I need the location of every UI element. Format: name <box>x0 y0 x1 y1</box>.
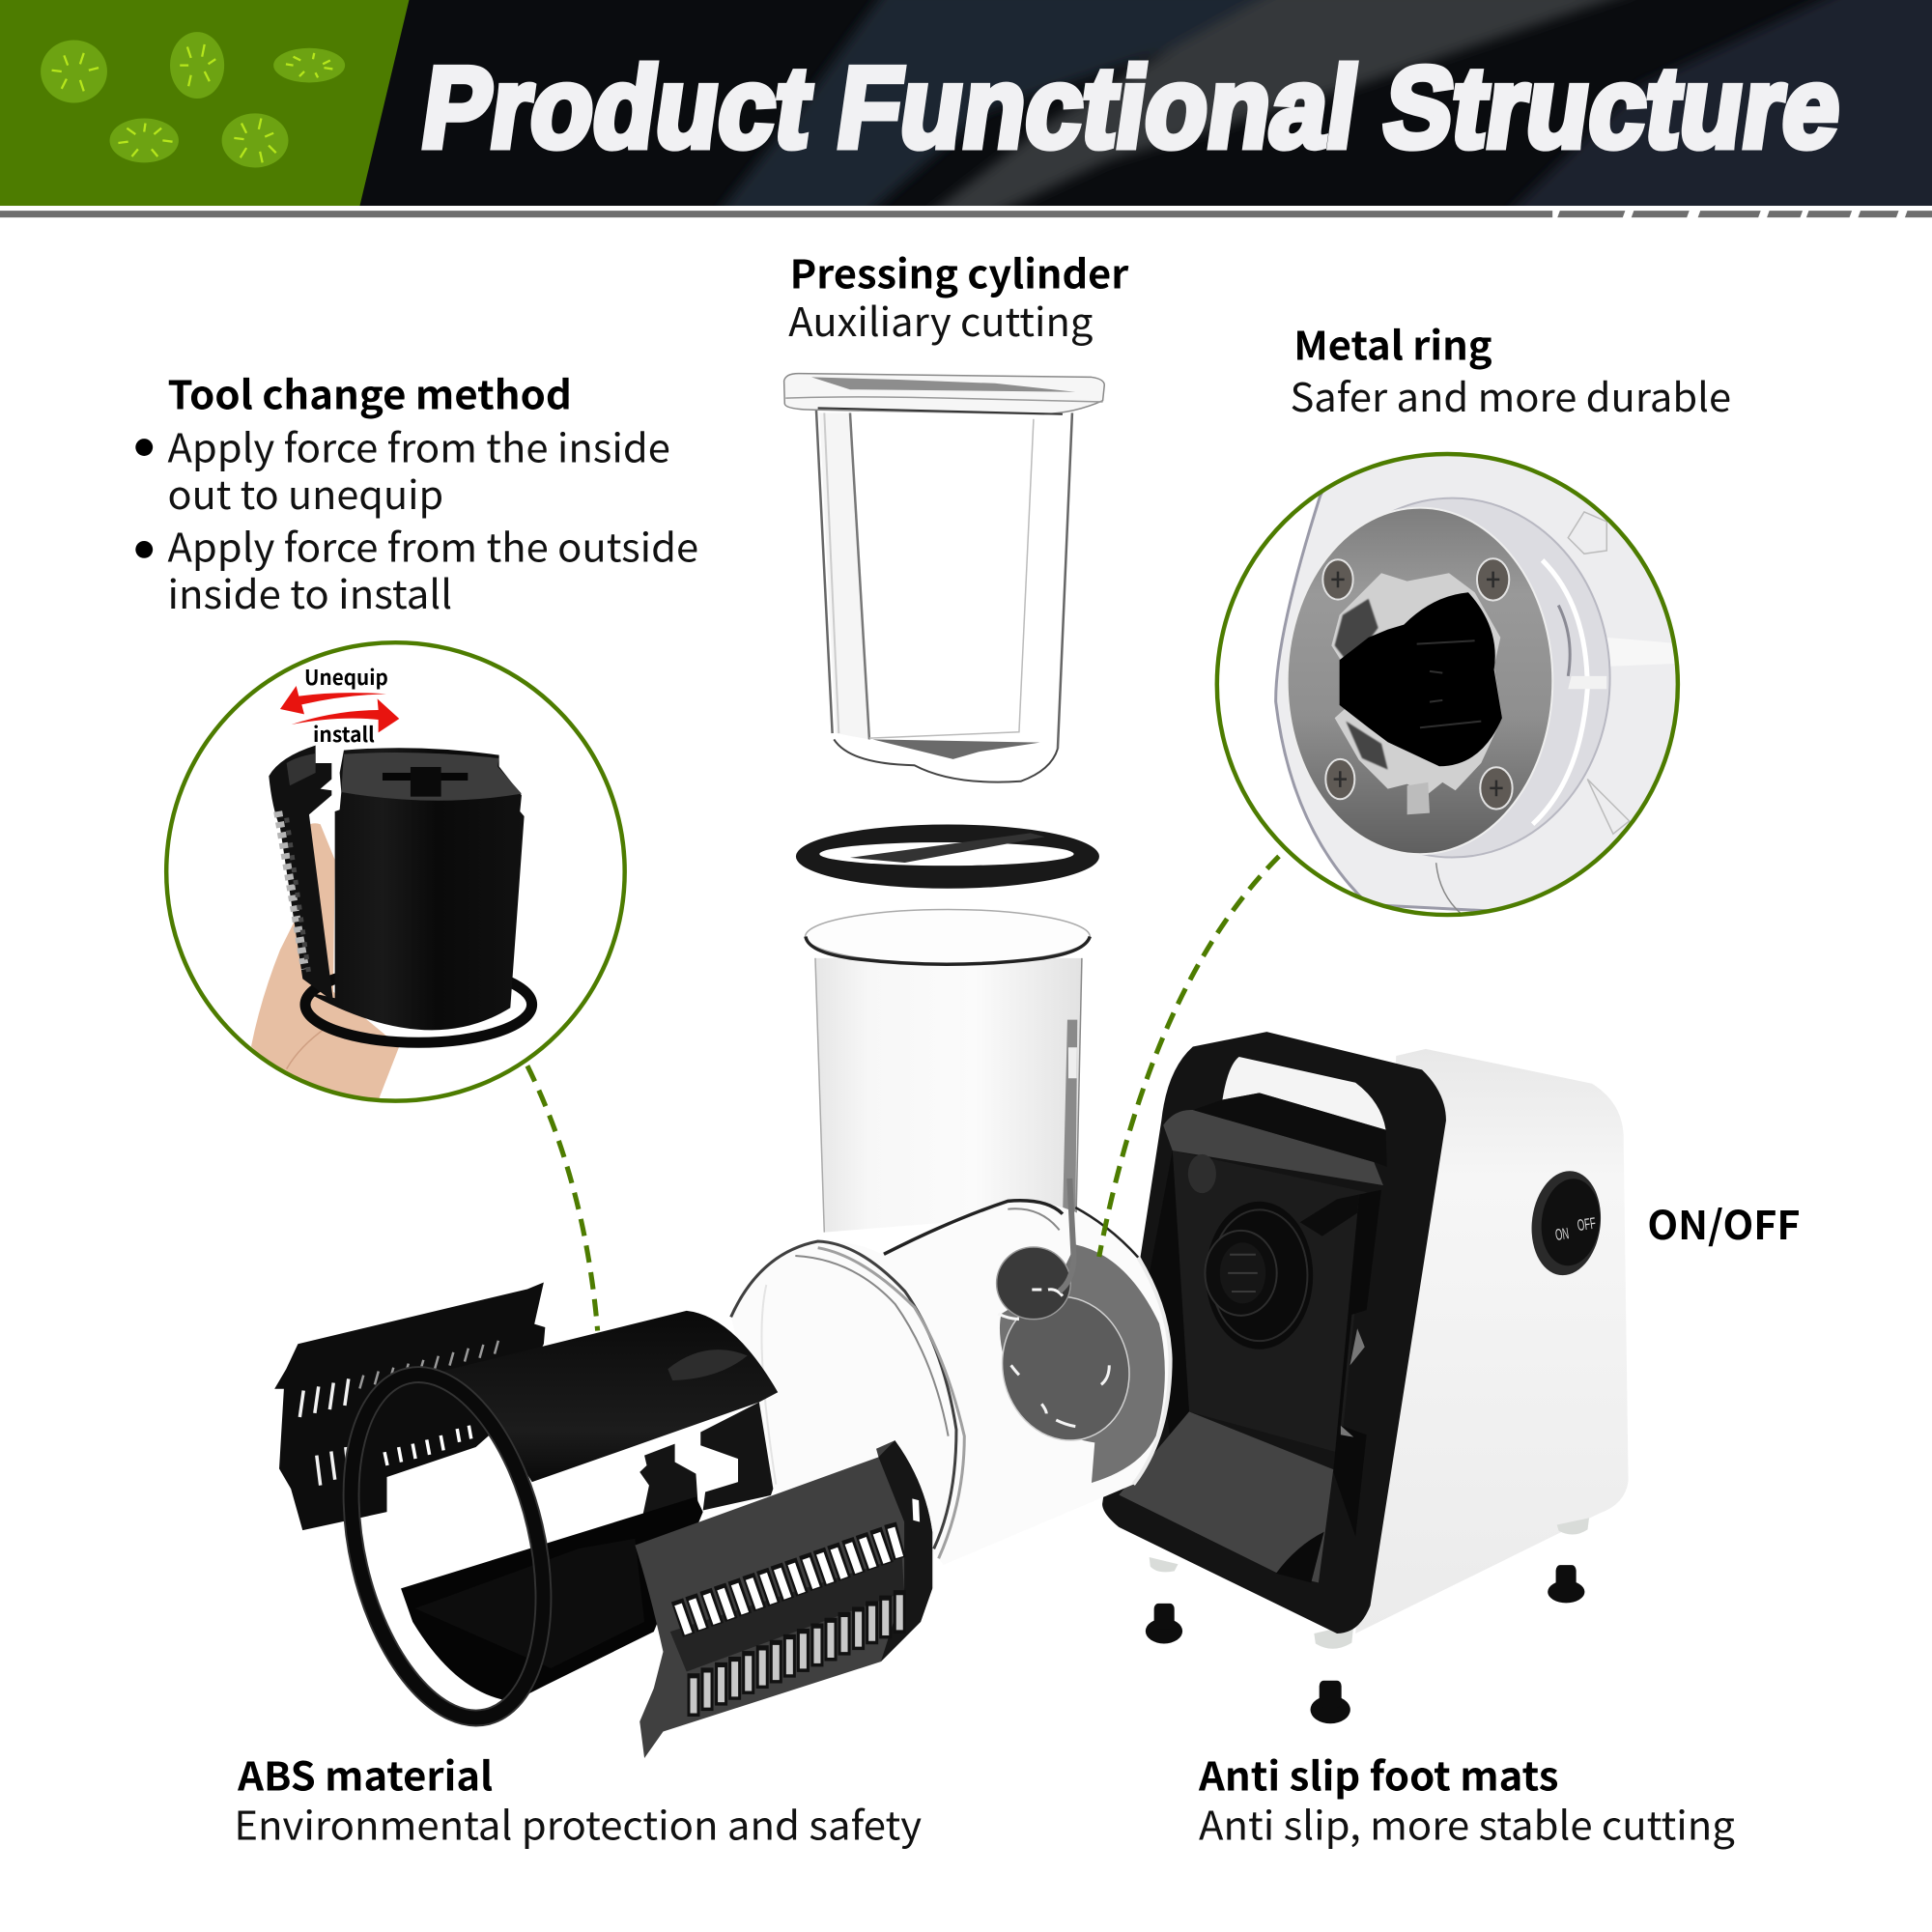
clear drum <box>731 1179 1171 1565</box>
black core <box>306 748 525 1030</box>
arrow labels: Unequip <box>304 662 388 692</box>
white housing <box>1355 1049 1629 1634</box>
label: pressing cylinder: Auxiliary cutting <box>788 291 1093 348</box>
label: abs material: ABS material <box>237 1745 493 1802</box>
label: tool change method: Apply force from the inside <box>167 416 670 473</box>
main barrel <box>439 1311 778 1482</box>
lower slots <box>694 1590 899 1717</box>
label: abs material <box>234 1745 922 1851</box>
drum end outline <box>1075 1208 1138 1258</box>
label: tool change method <box>135 363 698 620</box>
round recess hole <box>1188 1154 1216 1193</box>
main unit: motor body <box>1102 1032 1629 1723</box>
black gear core <box>1340 592 1502 766</box>
label: tool change method: Apply force from the outside <box>167 517 698 574</box>
chute rim <box>806 909 1090 964</box>
label: metal ring: Metal ring <box>1293 314 1492 371</box>
front blade panel <box>635 1440 932 1758</box>
barrel end ring <box>321 1355 574 1737</box>
chute neck curve <box>884 1201 1063 1254</box>
green corner panel <box>0 0 409 206</box>
label: on/off: ON/OFF <box>1647 1194 1801 1251</box>
red arrows <box>280 686 399 732</box>
cylinder flange <box>784 374 1104 414</box>
label: pressing cylinder: Pressing cylinder <box>790 242 1129 299</box>
rubber feet on body <box>1150 1518 1589 1649</box>
drum shell <box>731 1201 1171 1565</box>
metal plate <box>1288 508 1552 854</box>
top of front plate <box>1163 1110 1383 1185</box>
pressing cylinder, ring and chute <box>784 374 1104 1282</box>
dashed leader: metal ring <box>1099 856 1279 1257</box>
blade section <box>269 746 333 1002</box>
header banner <box>0 0 1932 218</box>
recessed panel <box>1173 1151 1367 1453</box>
switch lettering: OFF <box>1577 1214 1597 1235</box>
hand <box>251 823 399 1104</box>
handle opening <box>1222 1057 1386 1130</box>
black seal ring <box>796 824 1099 889</box>
upper slots <box>677 1523 899 1635</box>
circle outline <box>1217 454 1678 915</box>
circle outline <box>166 642 625 1101</box>
circle inset: tool change: install <box>313 719 375 749</box>
switch lettering: ON <box>1554 1224 1570 1244</box>
grey stripe under header <box>0 211 1932 217</box>
clear cover <box>1276 451 1684 921</box>
chute <box>815 958 1082 1282</box>
circle inset: tool change <box>166 642 625 1104</box>
grey back disc seen through the drum <box>1000 1244 1165 1483</box>
drum rim <box>731 1241 956 1548</box>
label: tool change method: Tool change method <box>167 363 572 420</box>
label: tool change method: inside to install <box>167 563 452 620</box>
screws <box>1322 558 1513 810</box>
dark header background <box>0 0 1932 206</box>
lower panel <box>1119 1411 1333 1582</box>
clear collar <box>1391 497 1611 858</box>
base ring <box>305 967 532 1042</box>
circle inset: metal ring <box>1217 451 1684 921</box>
silver opening <box>1331 573 1502 795</box>
icon: cucumber slices <box>41 32 345 167</box>
rocker switch bezel <box>1523 1162 1609 1285</box>
shredding drum and blades <box>274 1283 932 1758</box>
label: pressing cylinder <box>788 242 1129 348</box>
rear blade panel <box>274 1283 545 1530</box>
label: tool change method: out to unequip <box>167 464 443 521</box>
barrel struts <box>639 1444 698 1519</box>
label: abs material: Environmental protection and safety <box>234 1794 922 1851</box>
pressing cylinder body <box>816 410 1072 781</box>
dashed leader: tool change <box>527 1065 598 1331</box>
outlet hole <box>997 1247 1070 1320</box>
label: anti slip foot mats: Anti slip foot mats <box>1198 1745 1559 1802</box>
label: metal ring: Safer and more durable <box>1290 366 1731 423</box>
switch lettering <box>1554 1214 1597 1244</box>
label: anti slip foot mats: Anti slip, more stable cutting <box>1199 1794 1735 1851</box>
separate foot mats <box>1146 1565 1584 1723</box>
lower barrel <box>401 1497 703 1701</box>
shaft coupling <box>1300 1195 1359 1236</box>
label: anti slip foot mats <box>1198 1745 1735 1851</box>
label: metal ring <box>1290 314 1731 423</box>
core top face <box>341 753 522 801</box>
black front frame <box>1102 1032 1446 1634</box>
